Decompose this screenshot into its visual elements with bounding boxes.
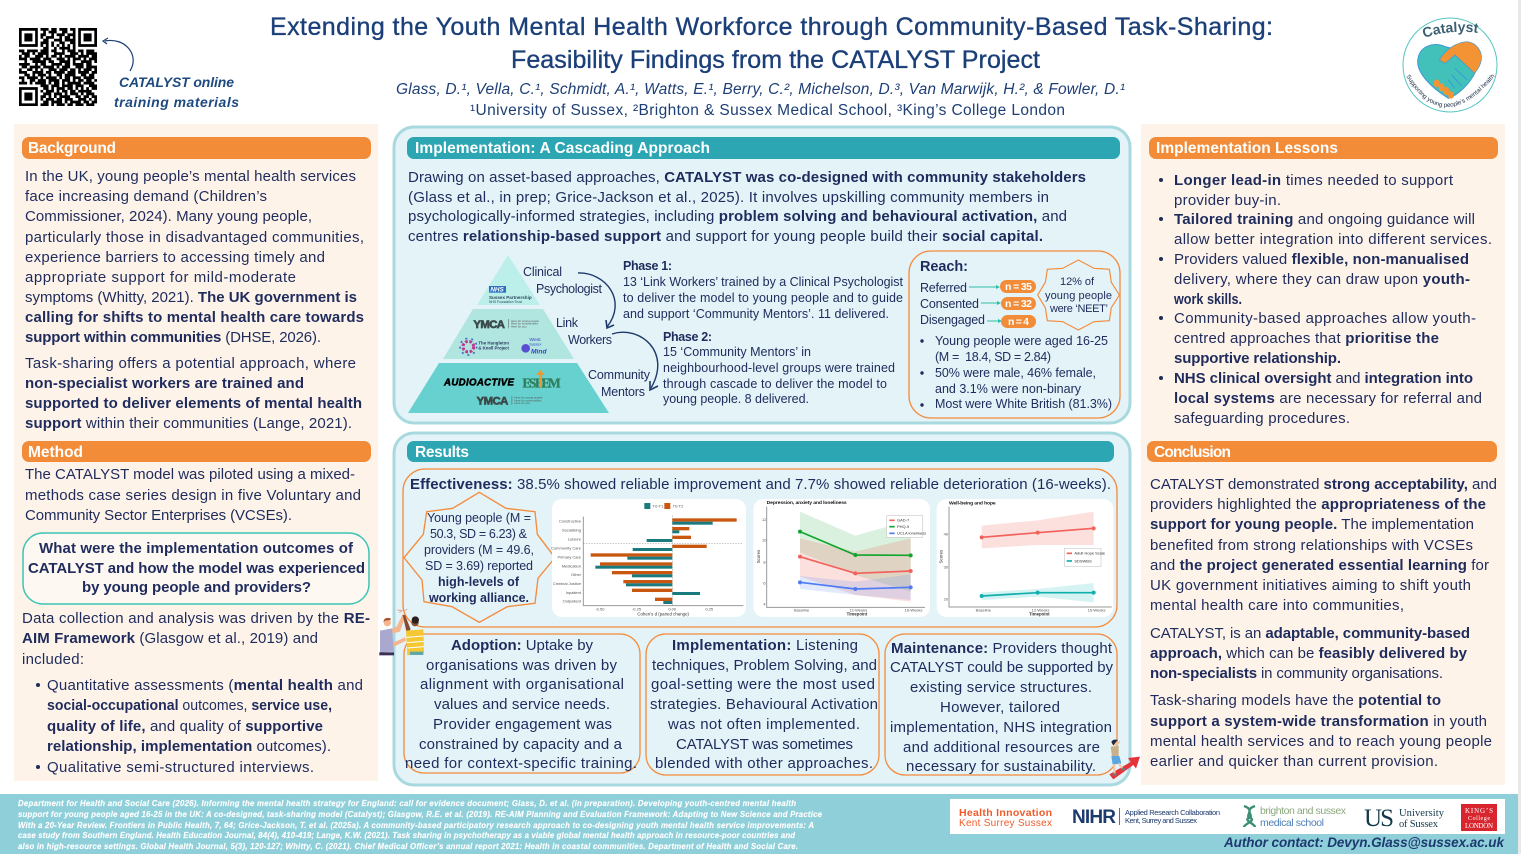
chart: bar chart effect sizes: -0.25 xyxy=(632,607,642,612)
list: lessons: Community-based approaches allow youth- xyxy=(1174,310,1476,327)
QR caption: CATALYST online xyxy=(119,74,234,90)
text: method intro: methods case series design in five Voluntary and xyxy=(25,487,361,504)
panel: implementation result: strategies. Behavioural Activation xyxy=(650,696,878,713)
pills: reach counts: n = 4 xyxy=(1008,316,1029,328)
chart: well-being and hope: 16-Weeks xyxy=(1088,608,1106,613)
list: methods bullets: relationship, implementation outcomes). xyxy=(47,738,331,755)
authors: Glass, D.¹, Vella, C.¹, Schmidt, A.¹, Watts, E.¹, Berry, C.², Michelson, D.³, Van Marwijk, H.², & Fowler, D.¹ xyxy=(396,81,1125,98)
callout: NEET star: young people xyxy=(1045,290,1112,302)
text: implementation intro: psychologically-informed strategies, including problem solving and behavioural activation, and xyxy=(408,208,1067,225)
panel: implementation result: was not often implemented. xyxy=(667,716,860,733)
text: conclusion paragraph 1: UK government initiatives aiming to shift youth xyxy=(1150,577,1471,594)
chart: bar chart effect sizes: Socialising xyxy=(562,528,581,533)
chart: bar chart effect sizes: Cohen’s d (paired change) xyxy=(637,612,690,617)
callout: research question: by young people and providers? xyxy=(82,579,311,596)
list: lessons: Tailored training and ongoing guidance will xyxy=(1174,211,1475,228)
authors xyxy=(396,81,1125,119)
text: conclusion paragraph 2 xyxy=(1150,625,1470,682)
panel: maintenance: implementation, NHS integration xyxy=(890,719,1112,736)
chart: bar chart effect sizes: Other xyxy=(571,572,582,577)
logo: NIHR: Applied Research Collaboration xyxy=(1125,808,1220,817)
panel: implementation result: blended with other approaches. xyxy=(655,755,873,772)
text: conclusion paragraph 2: CATALYST, is an adaptable, community-based xyxy=(1150,625,1470,642)
text: phase 2: through cascade to deliver the model to xyxy=(663,377,887,391)
callout: working alliance star xyxy=(404,492,555,622)
text: method intro: Community Sector Enterprises (VCSEs). xyxy=(25,507,292,524)
chart: pyramid: The Hangleton xyxy=(478,340,509,345)
heading: Background: Background xyxy=(28,140,116,157)
text: background paragraph 2: Task-sharing offers a potential approach, where xyxy=(25,355,356,372)
chart: well-being and hope: 40 xyxy=(944,532,949,537)
list: reach demographics: Most were White British (81.3%) xyxy=(935,397,1112,411)
chart: bar chart effect sizes: Community Care xyxy=(551,545,582,550)
QR caption xyxy=(114,74,239,110)
text: phase 1: to deliver the model to young people and to guide xyxy=(623,291,903,305)
panel: adoption xyxy=(404,634,640,773)
callout: NEET star xyxy=(1038,260,1119,330)
text: conclusion paragraph 1: and the project generated essential learning for xyxy=(1150,557,1489,574)
callout: working alliance star: high-levels of xyxy=(438,575,520,589)
panel: maintenance: However, tailored xyxy=(940,699,1060,716)
text: method intro xyxy=(25,466,361,524)
panel: effectiveness xyxy=(403,469,1117,627)
icon: high five figures xyxy=(379,609,424,655)
callout: working alliance star: working alliance. xyxy=(428,591,529,605)
chart: depression, anxiety and loneliness: 12 xyxy=(762,517,767,522)
text: phase 2: 15 ‘Community Mentors’ in xyxy=(663,345,811,359)
text: data collection: AIM Framework (Glasgow et al., 2019) and xyxy=(22,630,318,647)
text: conclusion paragraph 1: CATALYST demonstrated strong acceptability, and xyxy=(1150,476,1497,493)
text: background paragraph 1: experience barriers to accessing timely and xyxy=(25,249,325,266)
text: conclusion paragraph 2: approach, which can be feasibly delivered by xyxy=(1150,645,1468,662)
callout: working alliance star: Young people (M = xyxy=(427,511,531,525)
list: lessons: delivery, where they can draw upon youth- xyxy=(1174,271,1470,288)
panel: maintenance: necessary for sustainability. xyxy=(906,758,1096,775)
list: reach demographics: and 3.1% were non-binary xyxy=(935,382,1082,396)
chart: depression, anxiety and loneliness xyxy=(753,499,930,617)
chart: depression, anxiety and loneliness: 4 xyxy=(763,601,766,606)
chart: pyramid: & Knoll Project xyxy=(478,345,510,350)
panel: adoption: need for context-specific training. xyxy=(405,755,637,772)
panel: reach xyxy=(909,251,1120,418)
QR caption: training materials xyxy=(114,94,239,110)
chart: depression, anxiety and loneliness: UCLA loneliness xyxy=(897,531,926,536)
text: conclusion paragraph 3 xyxy=(1150,692,1492,770)
list: lessons xyxy=(1159,172,1492,427)
pills: reach counts: n = 32 xyxy=(1005,298,1032,310)
heading: Background xyxy=(22,137,371,159)
text: references: With a 20-Year Review. Frontiers in Public Health, 7, 64; Grice-Jackson, T. et al. (2025a). A community-based participatory research approach to co-designing youth mental health service improvements: A xyxy=(18,821,814,830)
text: method intro: The CATALYST model was piloted using a mixed- xyxy=(25,466,355,483)
logo: NIHR: Kent, Surrey and Sussex xyxy=(1125,816,1197,825)
chart: depression, anxiety and loneliness: Depression, anxiety and loneliness xyxy=(767,500,847,506)
panel: adoption: Adoption: Uptake by xyxy=(451,637,594,654)
text: conclusion paragraph 1: providers highlighted the appropriateness of the xyxy=(1150,496,1486,513)
list: methods bullets: social-occupational outcomes, service use, xyxy=(47,697,332,714)
chart: depression, anxiety and loneliness: PHQ-9 xyxy=(897,524,910,529)
text: background paragraph 1: symptoms (Whitty, 2021). The UK government is xyxy=(25,289,357,306)
list: lessons: Providers valued flexible, non-manualised xyxy=(1174,251,1469,268)
panel: maintenance: CATALYST could be supported by xyxy=(890,659,1114,676)
chart: bar chart effect sizes: Outpatient xyxy=(563,599,582,604)
icon: climber on red arrow xyxy=(1109,740,1140,779)
list: lessons: local systems are necessary for referral and xyxy=(1174,390,1482,407)
text: data collection: Data collection and analysis was driven by the RE- xyxy=(22,610,370,627)
chart: well-being and hope: Well-being and hope xyxy=(949,500,996,506)
chart: bar chart effect sizes: T0-T1 xyxy=(653,504,664,509)
heading: Method xyxy=(22,441,371,462)
text: implementation intro: Drawing on asset-based approaches, CATALYST was co-designed with community stakeholders xyxy=(408,169,1086,186)
list: methods bullets xyxy=(36,677,363,776)
text: author contact: Author contact: Devyn.Glass@sussex.ac.uk xyxy=(1223,835,1505,850)
text: background paragraph 2: support within their communities (Lange, 2021). xyxy=(25,415,352,432)
chart: bar chart effect sizes: Criminal Justice xyxy=(553,581,582,586)
callout: NEET star: were ‘NEET’ xyxy=(1049,303,1108,315)
text: references: Department for Health and Social Care (2026). Informing the mental health strategy for England: call for evidence document; Glass, D. et al. (in preparation). Developing youth-centred mental health xyxy=(18,799,796,808)
panel: adoption: Provider engagement was xyxy=(433,716,612,733)
callout: working alliance star: SD = 3.69) reported xyxy=(425,559,533,573)
chart: pyramid: NHS Foundation Trust xyxy=(489,300,522,304)
logo: University of Sussex xyxy=(1364,805,1445,832)
list: lessons: centred approaches that prioritise the xyxy=(1174,330,1439,347)
list: reach demographics: 50% were male, 46% female, xyxy=(935,366,1096,380)
text: conclusion paragraph 1 xyxy=(1150,476,1497,614)
pyramid labels: Workers xyxy=(568,333,612,347)
heading: implementation: Implementation: A Cascading Approach xyxy=(415,140,710,157)
text: phase 2: neighbourhood-level groups were trained xyxy=(663,361,895,375)
chart: pyramid: NHS xyxy=(490,287,504,294)
chart: depression, anxiety and loneliness: Timepoint xyxy=(847,612,868,617)
text: conclusion paragraph 3: Task-sharing models have the potential to xyxy=(1150,692,1441,709)
text: background paragraph 2: supported to deliver elements of mental health xyxy=(25,395,362,412)
panel: implementation result: Implementation: Listening xyxy=(672,637,858,654)
chart: pyramid: Sussex xyxy=(529,343,541,347)
title: Extending the Youth Mental Health Workforce through Community-Based Task-Sharing: xyxy=(270,13,1273,41)
logo: University of Sussex: of Sussex xyxy=(1399,819,1439,830)
panel: implementation result xyxy=(646,634,879,775)
pyramid labels: Mentors xyxy=(601,385,645,399)
logo: NIHR xyxy=(1072,807,1220,828)
pyramid labels: Clinical xyxy=(523,265,562,279)
QR code xyxy=(19,28,97,106)
panel: footer xyxy=(0,794,1518,854)
chart: well-being and hope: Adult Hope Scale xyxy=(1074,551,1106,556)
callout: working alliance star: providers (M = 49.6, xyxy=(424,543,534,557)
list: methods bullets: quality of life, and quality of supportive xyxy=(47,718,323,735)
panel: adoption: alignment with organisational xyxy=(420,676,624,693)
chart: pyramid: Sussex Partnership xyxy=(489,295,532,301)
text: data collection xyxy=(22,610,370,668)
panel: right column xyxy=(1141,124,1505,785)
text: implementation intro xyxy=(408,169,1086,245)
text: background paragraph 2 xyxy=(25,355,362,432)
list: lessons: NHS clinical oversight and integration into xyxy=(1174,370,1473,387)
chart: well-being and hope xyxy=(937,499,1113,617)
text: phase 2: Phase 2: xyxy=(663,330,712,344)
pyramid labels: Community xyxy=(588,368,651,382)
chart: depression, anxiety and loneliness: Scores xyxy=(756,550,761,563)
text: references xyxy=(18,799,823,851)
text: references: case study from Southern England. Health Education Journal, 84(4), 410-419; Lange, K.W. (2021). Task sharing in psychotherapy as a viable global mental health approach in resource-poor countries and xyxy=(18,831,795,840)
chart: well-being and hope: Timepoint xyxy=(1029,612,1050,617)
chart: well-being and hope: Scores xyxy=(938,550,943,563)
heading: Method: Method xyxy=(28,444,83,461)
icon: Catalyst logo: Catalyst xyxy=(1422,22,1478,37)
text: implementation intro: (Glass et al., in prep; Grice-Jackson et al., 2025). It involves upskilling community members in xyxy=(408,189,1049,206)
logo: King's College London xyxy=(1461,804,1497,831)
text: conclusion paragraph 1: benefited from strong relationships with VCSEs xyxy=(1150,537,1473,554)
chart: pyramid: YMCA xyxy=(473,319,505,331)
chart: pyramid: Here for communities xyxy=(514,398,542,402)
panel: effectiveness: Effectiveness: 38.5% showed reliable improvement and 7.7% showed reliable deterioration (16-weeks). xyxy=(410,476,1111,493)
list: reach demographics: Young people were aged 16-25 xyxy=(935,334,1108,348)
text: background paragraph 1: appropriate support for mild-moderate xyxy=(25,269,296,286)
chart: depression, anxiety and loneliness: GAD-7 xyxy=(897,518,910,523)
chart: bar chart effect sizes: Primary Care xyxy=(558,554,582,559)
panel: implementation result: techniques, Problem Solving, and xyxy=(652,657,877,674)
chart: pyramid xyxy=(408,255,651,413)
chart: pyramid: Here for communities xyxy=(511,322,538,326)
logo: NIHR: NIHR xyxy=(1072,807,1116,828)
text: phase 1: 13 ‘Link Workers’ trained by a Clinical Psychologist xyxy=(623,275,904,289)
logo: University of Sussex: US xyxy=(1364,805,1394,832)
heading: implementation lessons xyxy=(1149,137,1498,159)
heading: results: Results xyxy=(415,444,469,461)
panel: left column xyxy=(14,124,378,781)
panel: implementation approach xyxy=(394,127,1130,423)
panel: maintenance xyxy=(885,634,1117,775)
pyramid labels xyxy=(523,265,651,399)
logo: Brighton and Sussex Medical School xyxy=(1244,805,1347,829)
chart: pyramid: Here for young people xyxy=(514,396,543,400)
chart: pyramid: Mind xyxy=(531,348,547,355)
panel: implementation result: CATALYST was sometimes xyxy=(676,736,853,753)
chart: pyramid: AUDIOACTIVE xyxy=(443,377,515,388)
chart: well-being and hope: SDSWBS xyxy=(1074,558,1092,563)
panel: adoption: values and service needs. xyxy=(434,696,610,713)
icon: Catalyst logo xyxy=(1402,18,1498,112)
logo: Health Innovation: Health Innovation xyxy=(959,807,1052,819)
heading: implementation xyxy=(407,137,1120,159)
text: references: also in high-resource settings. Global Health Journal, 5(3), 120-127; Whitty, C. (2021). Chief Medical Officer’s annual report 2021: Health in coastal communities. Department of Health and Social Care. xyxy=(18,842,798,851)
arrows: reach flow xyxy=(969,285,1002,323)
text: background paragraph 1: Commissioner, 2024). Many young people, xyxy=(25,208,312,225)
chart: well-being and hope: 30 xyxy=(944,564,949,569)
pyramid labels: Psychologist xyxy=(536,282,603,296)
text: background paragraph 2: non-specialist workers are trained and xyxy=(25,375,304,392)
list: reach demographics: (M = 18.4, SD = 2.84) xyxy=(935,350,1051,364)
authors: ¹University of Sussex, ²Brighton & Sussex Medical School, ³King’s College London xyxy=(470,102,1065,119)
text: background paragraph 1: particularly those in disadvantaged communities, xyxy=(25,229,364,246)
chart: well-being and hope: 20 xyxy=(944,596,949,601)
list: lessons: safeguarding procedures. xyxy=(1174,410,1350,427)
list: lessons: provider buy-in. xyxy=(1174,192,1281,209)
panel: reach: Referred xyxy=(920,281,967,295)
panel: maintenance: and additional resources are xyxy=(903,739,1100,756)
chart: depression, anxiety and loneliness: 16-Weeks xyxy=(905,608,923,613)
chart: bar chart effect sizes: 0.00 xyxy=(668,607,677,612)
title: Feasibility Findings from the CATALYST Project xyxy=(511,46,1040,74)
panel: maintenance: Maintenance: Providers thought xyxy=(891,640,1113,657)
list: methods bullets: Quantitative assessments (mental health and xyxy=(47,677,363,694)
heading: conclusion: Conclusion xyxy=(1154,444,1231,461)
heading: conclusion xyxy=(1147,441,1497,462)
text: phase 1: and support ‘Community Mentors’. 11 delivered. xyxy=(623,307,889,321)
chart: bar chart effect sizes: T0-T2 xyxy=(673,504,684,509)
callout: research question: What were the implementation outcomes of xyxy=(39,540,354,557)
text: background paragraph 1: In the UK, young people’s mental health services xyxy=(25,168,356,185)
chart: bar chart effect sizes: Leisure xyxy=(568,537,582,542)
chart: bar chart effect sizes: Inpatient xyxy=(566,590,582,595)
callout: research question xyxy=(23,533,369,604)
chart: bar chart effect sizes: 0.25 xyxy=(705,607,714,612)
chart: bar chart effect sizes xyxy=(551,499,746,617)
panel: results xyxy=(394,433,1130,785)
heading: results xyxy=(407,441,1114,462)
text: references: support for young people aged 16-25 in the UK: A co-designed, task-sharing model (Catalyst); Glasgow, R.E. et al. (2019). RE-AIM Planning and Evaluation Framework: Adapting to New Science and Practice xyxy=(18,810,823,819)
logo: University of Sussex: University xyxy=(1399,808,1445,819)
chart: pyramid: West xyxy=(529,337,541,343)
title xyxy=(270,13,1273,74)
text: phase 1: Phase 1: xyxy=(623,259,672,273)
panel: maintenance: existing service structures. xyxy=(910,679,1092,696)
callout: research question: CATALYST and how the model was experienced xyxy=(28,560,365,577)
logo: Health Innovation xyxy=(959,807,1052,829)
chart: pyramid: Here for young people xyxy=(511,319,539,323)
chart: pyramid: Here for you xyxy=(511,324,527,328)
list: reach demographics xyxy=(920,334,1112,411)
text: implementation intro: centres relationship-based support and support for young people build their social capital. xyxy=(408,228,1043,245)
chart: depression, anxiety and loneliness: 6 xyxy=(763,580,766,585)
text: background paragraph 1: support within communities (DHSE, 2026). xyxy=(25,329,321,346)
chart: pyramid: ES EEM xyxy=(522,375,561,390)
list: lessons: allow better integration into different services. xyxy=(1174,231,1492,248)
pills: reach counts xyxy=(1000,280,1036,328)
text: phase 2 xyxy=(663,330,895,406)
logo: Brighton and Sussex Medical School: medical school xyxy=(1260,817,1324,829)
chart: well-being and hope: Baseline xyxy=(976,608,992,613)
arrow: phase 1 xyxy=(578,273,615,328)
chart: depression, anxiety and loneliness: 8 xyxy=(763,559,766,564)
pyramid labels: Link xyxy=(556,316,579,330)
panel: reach: Disengaged xyxy=(920,313,985,327)
heading: implementation lessons: Implementation Lessons xyxy=(1156,140,1338,157)
text: data collection: included: xyxy=(22,651,84,668)
chart: well-being and hope: 12-Weeks xyxy=(1032,608,1050,613)
chart: bar chart effect sizes: Medication xyxy=(562,563,581,568)
chart: depression, anxiety and loneliness: 12-Weeks xyxy=(849,608,867,613)
panel: reach: Reach: xyxy=(920,259,968,275)
list: methods bullets: Qualitative semi-structured interviews. xyxy=(47,759,314,776)
text: conclusion paragraph 2: non-specialists in community organisations. xyxy=(1150,665,1443,682)
text: phase 1 xyxy=(623,259,904,321)
pills: reach counts: n = 35 xyxy=(1005,281,1032,293)
callout: NEET star: 12% of xyxy=(1060,276,1095,288)
logo: King's College London: KING’S xyxy=(1465,807,1493,815)
chart: depression, anxiety and loneliness: 10 xyxy=(762,538,767,543)
list: lessons: supportive relationship. xyxy=(1174,350,1341,367)
text: conclusion paragraph 3: earlier and quicker than current provision. xyxy=(1150,753,1438,770)
panel: reach: Consented xyxy=(920,297,979,311)
logos strip xyxy=(950,799,1505,834)
callout: working alliance star: 50.3, SD = 6.23) & xyxy=(430,527,528,541)
logo: King's College London: LONDON xyxy=(1465,822,1493,830)
text: background paragraph 1: face increasing demand (Children’s xyxy=(25,188,267,205)
panel: adoption: organisations was driven by xyxy=(426,657,618,674)
arrow: QR pointer xyxy=(103,38,133,71)
logo: Brighton and Sussex Medical School: brighton and sussex xyxy=(1260,805,1347,817)
panel: adoption: constrained by capacity and a xyxy=(419,736,623,753)
chart: bar chart effect sizes: -0.50 xyxy=(595,607,605,612)
text: conclusion paragraph 3: support a system-wide transformation in youth xyxy=(1150,713,1487,730)
text: phase 2: young people. 8 delivered. xyxy=(663,392,809,406)
logo: King's College London: College xyxy=(1468,816,1490,822)
list: lessons: work skills. xyxy=(1173,291,1242,308)
text: conclusion paragraph 1: mental health care into communities, xyxy=(1150,597,1404,614)
list: lessons: Longer lead-in times needed to support xyxy=(1174,172,1454,189)
chart: pyramid: YMCA xyxy=(477,396,508,408)
text: conclusion paragraph 1: support for young people. The implementation xyxy=(1150,516,1474,533)
chart: pyramid: Here for you xyxy=(514,401,530,405)
arrow: phase 2 xyxy=(612,332,658,390)
logo: Health Innovation: Kent Surrey Sussex xyxy=(959,818,1052,829)
text: background paragraph 1 xyxy=(25,168,364,346)
chart: depression, anxiety and loneliness: Baseline xyxy=(794,608,810,613)
chart: bar chart effect sizes: Constructive xyxy=(559,519,582,524)
panel: implementation result: goal-setting were the most used xyxy=(651,676,875,693)
text: background paragraph 1: calling for shifts to mental health care towards xyxy=(25,309,364,326)
icon: Catalyst logo: Supporting young people’s mental health xyxy=(1406,74,1495,108)
text: conclusion paragraph 3: mental health services and to reach young people xyxy=(1150,733,1492,750)
